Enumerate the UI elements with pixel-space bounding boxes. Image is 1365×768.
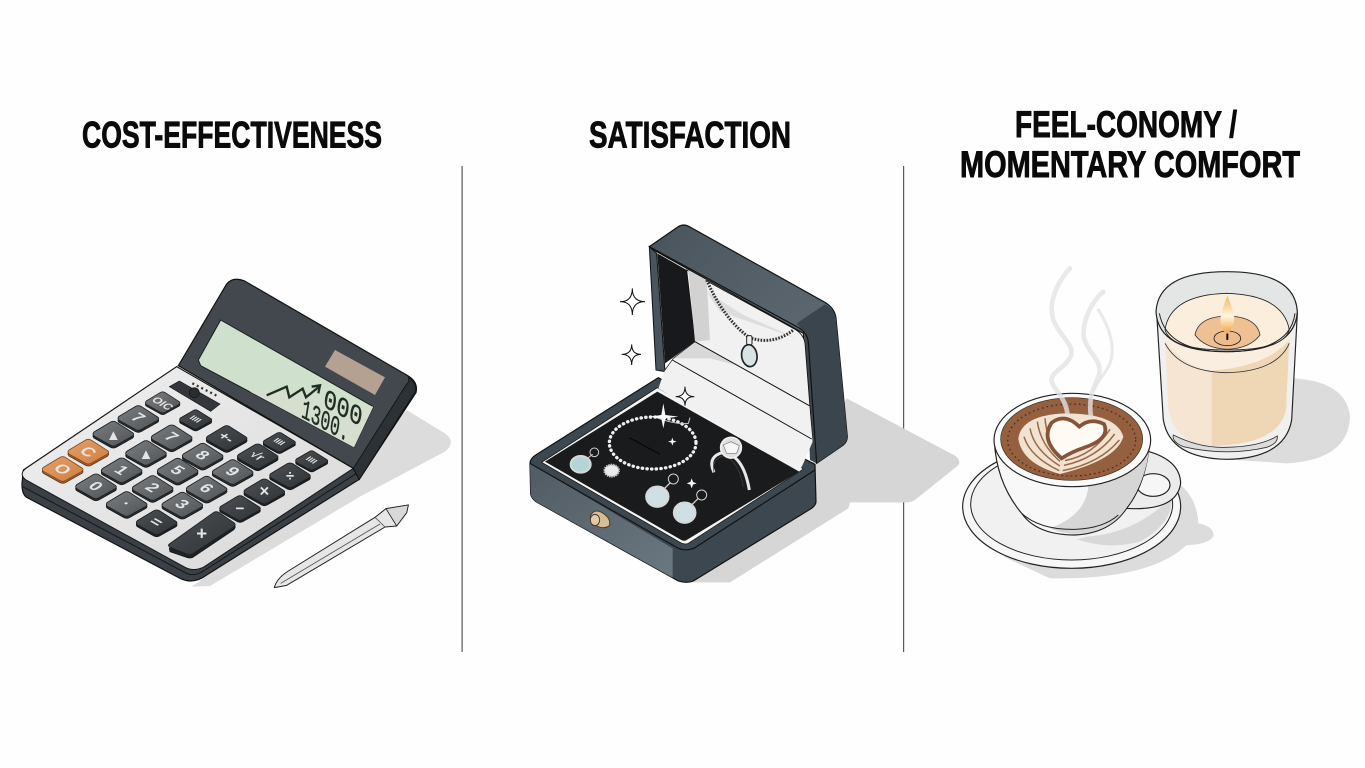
wax side dark [1212,340,1289,446]
key labels: 7 [160,430,182,444]
cushion flap [658,342,813,472]
cup handle [1125,451,1181,509]
wax edge curve [1165,343,1289,373]
glass rim outer [1156,272,1297,352]
glass rim inner [1159,313,1295,352]
saucer cast shadow [1077,497,1172,545]
slide switch [169,381,220,411]
sparkles [620,288,697,488]
right earrings [646,474,707,523]
lid right face [797,304,847,463]
key labels: 3 [170,497,193,512]
key labels: C [75,444,100,460]
coffee [1001,398,1143,480]
flap highlight [673,342,738,366]
key labels: × [259,482,269,501]
key labels: + [196,522,207,543]
key labels: IIII [187,414,204,424]
calculator face plate [22,367,353,569]
key labels [49,395,320,543]
title: satisfaction: SATISFACTION [589,114,791,156]
base rim [530,378,816,582]
key labels: ▲ [139,447,153,463]
latte art [1018,413,1123,474]
ring [712,437,749,490]
coffee rim dots [1008,404,1136,476]
cushion line 2 [672,360,812,439]
candle [1156,272,1297,459]
key labels: OIC [148,395,176,412]
steam [1052,268,1112,415]
left earring [571,448,599,473]
solar panel [325,350,385,395]
calculator body seam [23,473,357,575]
black velvet tray [545,392,799,541]
key labels: = [145,515,168,530]
lid top face [649,225,847,463]
key labels: 6 [195,481,217,496]
lid interior white panel [687,270,813,442]
candle shadow [1237,378,1350,463]
wick [1226,333,1228,340]
box base [530,342,816,582]
wax top [1165,293,1289,350]
illustration: calculator and pen [22,279,451,588]
flap outer edge [665,342,695,370]
saucer [963,445,1181,568]
wick ring [1214,331,1241,346]
key labels: IIII [303,455,320,465]
lid interior shading [688,270,710,342]
cushion line 1 [695,342,809,406]
lid interior dark [657,253,695,363]
key labels: · [116,497,136,510]
key labels: − [236,500,245,517]
display panel [178,279,416,479]
LCD screen [198,320,373,451]
calculator shadow [192,410,451,587]
LCD screen: 1300. [299,396,351,451]
tray necklace [604,417,696,477]
key labels: ▲ [106,428,121,444]
key labels: 9 [221,464,243,479]
keypad [42,392,328,558]
LCD digits: 000 [321,385,364,435]
calculator body [22,367,359,581]
title: cost-effectiveness: COST-EFFECTIVENESS [82,114,382,156]
key labels: O [49,461,75,478]
flame [1220,296,1234,333]
illustration: coffee and candle [963,268,1350,578]
key labels: 2 [141,480,163,495]
base left face [530,463,673,578]
divider: left [462,166,463,652]
pen [274,505,408,588]
title: feel-conomy / momentary comfort: FEEL-CONOMY / [1015,104,1237,145]
glass base [1173,435,1277,452]
display panel side [353,377,415,479]
wax side light [1165,340,1212,446]
LCD trend line [267,385,320,397]
key labels: √r [247,449,268,463]
glass body [1157,313,1297,459]
hanging pendant [740,336,758,368]
cup body [994,393,1151,535]
key labels: 8 [191,448,213,463]
key labels: +- [213,430,238,446]
white trim [542,388,803,544]
key labels: ÷ [286,469,294,485]
lid interior shading band [707,292,797,338]
wax upper band [1165,327,1289,373]
base outline [530,463,815,550]
key labels: 5 [166,463,188,478]
jewelry box shadow [690,398,959,582]
lid outline front [649,247,817,463]
illustration: jewelry box [530,225,959,582]
divider: right [903,166,904,652]
saucer shadow [1003,480,1213,578]
hanging necklace chain [707,280,793,340]
melt pool [1195,316,1260,349]
key labels: 7 [126,410,149,425]
title: feel-conomy / momentary comfort [960,104,1300,185]
clasp [590,511,610,528]
key labels: 0 [84,479,107,494]
key labels: IIII [271,436,288,447]
key labels: 1 [110,463,132,478]
lid front left rim [649,247,665,372]
box lid [649,225,847,463]
